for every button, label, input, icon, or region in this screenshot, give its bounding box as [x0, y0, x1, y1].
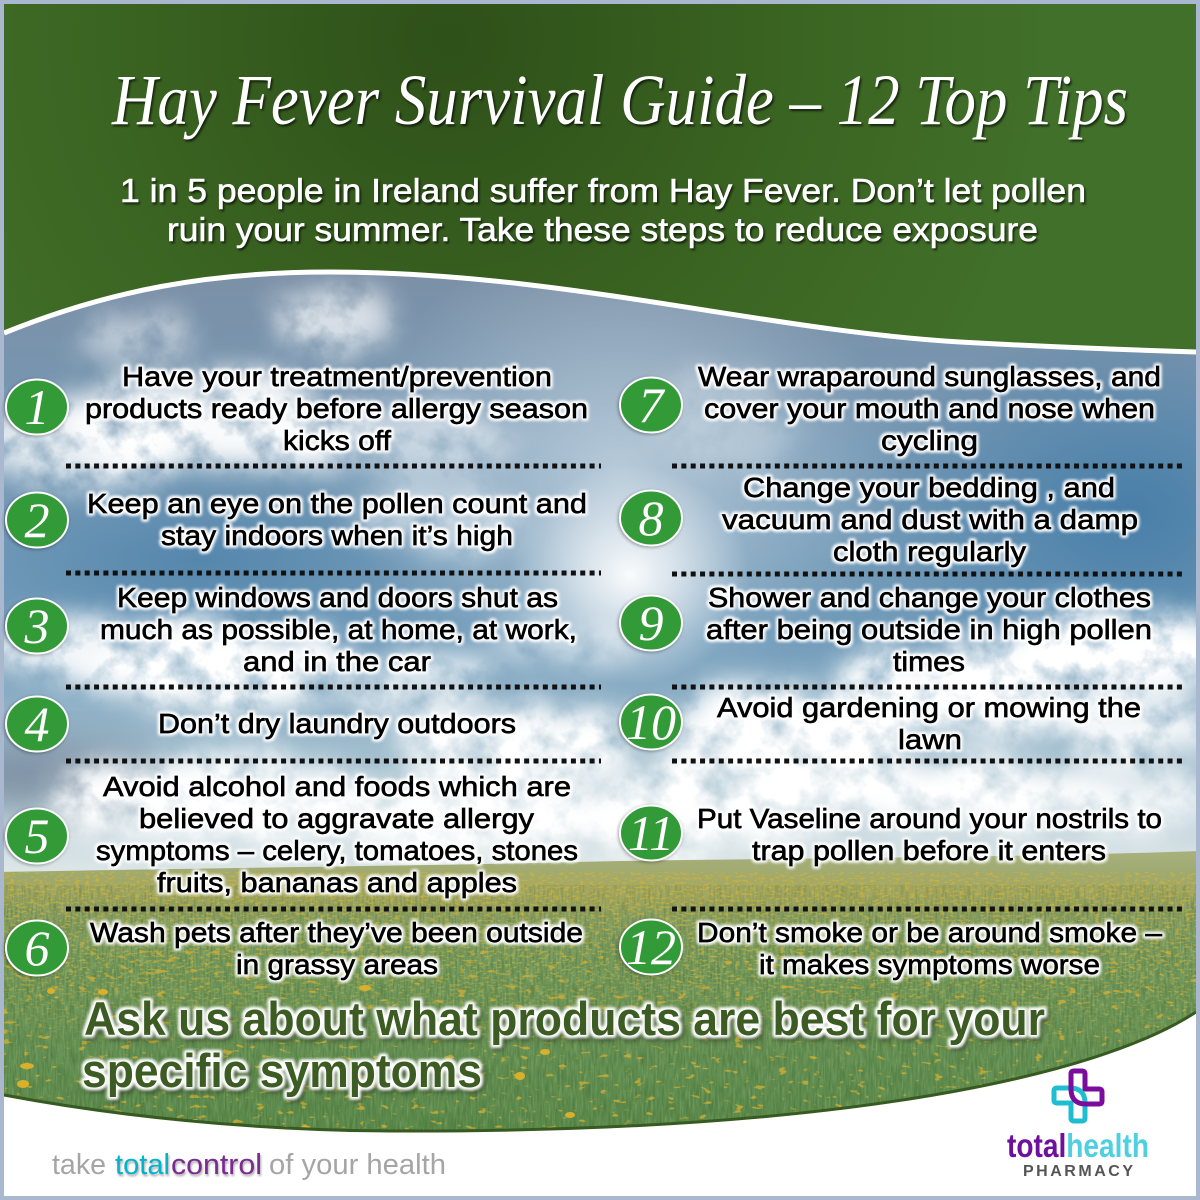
subtitle: 1 in 5 people in Ireland suffer from Hay Fever. Don’t let pollen — [120, 172, 1086, 209]
tip 12 text: Don’t smoke or be around smoke – — [697, 917, 1162, 948]
tip 5 text: believed to aggravate allergy — [139, 803, 534, 834]
tip 9 text: Shower and change your clothes — [708, 582, 1151, 613]
tip 9 text: after being outside in high pollen — [706, 614, 1152, 645]
tip 5 — [6, 771, 578, 898]
number badge 3 — [6, 598, 68, 654]
tip 2 — [6, 488, 587, 551]
sky — [0, 260, 1200, 880]
tip 11 text: trap pollen before it enters — [752, 835, 1106, 866]
sun — [519, 478, 742, 677]
tip 2 text: Keep an eye on the pollen count and — [87, 488, 587, 519]
tip 6 text: Wash pets after they’ve been outside — [90, 917, 583, 948]
tip 8 text: vacuum and dust with a damp — [722, 504, 1138, 535]
number badge 7: 7 — [638, 377, 666, 433]
tip 5 text: symptoms – celery, tomatoes, stones — [96, 835, 578, 866]
tip 1 text: Have your treatment/prevention — [122, 361, 552, 392]
pale blades — [0, 885, 1200, 1140]
tip 5 text — [96, 771, 578, 898]
tip 1 text: kicks off — [283, 425, 391, 456]
tip 1 text: products ready before allergy season — [85, 393, 588, 424]
green edge under meadow — [4, 1012, 1196, 1131]
tip 10 text: lawn — [898, 724, 962, 755]
tip 1 text — [85, 361, 588, 456]
tip 11 — [620, 803, 1162, 866]
tip 11 text — [697, 803, 1162, 866]
near flowers — [0, 950, 1200, 1140]
grass texture — [0, 885, 1200, 1140]
tip 10 text — [717, 692, 1141, 755]
tip 8 text — [722, 472, 1138, 567]
number badge 12: 12 — [626, 919, 676, 975]
photo: sky and meadow — [0, 240, 1200, 1146]
number badge 4: 4 — [24, 696, 50, 752]
tip 7 — [620, 361, 1161, 456]
call to action: Ask us about what products are best for your — [84, 992, 1045, 1045]
number badge 2 — [6, 492, 68, 548]
tip 11 text: Put Vaseline around your nostrils to — [697, 803, 1162, 834]
number badge 9: 9 — [638, 595, 664, 651]
number badge 10: 10 — [626, 694, 676, 750]
tip 9 text — [706, 582, 1152, 677]
tip 6 text — [90, 917, 583, 980]
tip 9 text: times — [893, 646, 965, 677]
number badge 9 — [620, 595, 682, 651]
tip 2 text — [87, 488, 587, 551]
footer tagline — [52, 1149, 446, 1181]
tip 12 — [620, 917, 1162, 980]
dark cloud left — [0, 743, 160, 807]
tip 2 text: stay indoors when it’s high — [161, 520, 513, 551]
logo pharmacy: PHARMACY — [1023, 1163, 1133, 1180]
tip 8 text: Change your bedding , and — [743, 472, 1115, 503]
number badge 8: 8 — [638, 490, 664, 546]
deep blue left sky — [35, 495, 364, 620]
meadow — [0, 851, 1200, 1140]
footer tagline: control — [171, 1149, 262, 1181]
number badge 3: 3 — [24, 598, 50, 654]
tip 12 text — [697, 917, 1162, 980]
number badge 1: 1 — [24, 379, 50, 435]
tip 5 text: fruits, bananas and apples — [157, 867, 517, 898]
number badge 7 — [620, 377, 682, 433]
subtitle: ruin your summer. Take these steps to reduce exposure — [167, 211, 1038, 248]
subtitle — [120, 172, 1086, 248]
logo cross — [1054, 1071, 1102, 1121]
footer tagline: total — [115, 1149, 170, 1181]
number badge 8 — [620, 490, 682, 546]
tip 7 text: Wear wraparound sunglasses, and — [698, 361, 1161, 392]
call to action — [82, 992, 1045, 1097]
number badge 6 — [6, 920, 68, 976]
tip 3 text — [100, 582, 577, 677]
tip 4 text: Don’t dry laundry outdoors — [158, 708, 516, 739]
yellow flower haze — [0, 876, 1200, 908]
tip 4 — [6, 696, 516, 752]
tip dividers — [66, 466, 1183, 909]
tip 7 text: cover your mouth and nose when — [704, 393, 1155, 424]
number badge 4 — [6, 696, 68, 752]
logo — [1007, 1071, 1149, 1180]
tip 6 — [6, 917, 583, 980]
tip 10 text: Avoid gardening or mowing the — [717, 692, 1141, 723]
number badge 1 — [6, 379, 68, 435]
tip 7 text: cycling — [881, 425, 978, 456]
tip 3 text: Keep windows and doors shut as — [117, 582, 558, 613]
number badge 5: 5 — [24, 808, 50, 864]
sun glow — [382, 287, 866, 664]
tip 8 — [620, 472, 1138, 567]
footer tagline: of your health — [269, 1149, 446, 1181]
number badge 2: 2 — [24, 492, 50, 548]
deep blue right sky — [920, 353, 1196, 624]
tip 5 text: Avoid alcohol and foods which are — [103, 771, 571, 802]
green header band — [4, 4, 1196, 354]
clouds — [0, 288, 1200, 868]
number badge 5 — [6, 808, 68, 864]
tip 3 text: much as possible, at home, at work, — [100, 614, 577, 645]
tip 8 text: cloth regularly — [833, 536, 1026, 567]
logo wordmark: totalhealth — [1007, 1127, 1149, 1164]
tip 10 — [620, 692, 1141, 755]
tip 3 — [6, 582, 577, 677]
dandelions — [17, 985, 575, 1128]
number badge 6: 6 — [24, 920, 50, 976]
tip 3 text: and in the car — [243, 646, 431, 677]
tip 6 text: in grassy areas — [236, 949, 438, 980]
call to action: specific symptoms — [82, 1044, 482, 1097]
tip 12 text: it makes symptoms worse — [759, 949, 1100, 980]
white curve above photo — [4, 272, 1196, 352]
footer tagline: take — [52, 1149, 106, 1181]
number badge 11: 11 — [628, 805, 674, 861]
tip 7 text — [698, 361, 1161, 456]
tip 1 — [6, 361, 588, 456]
distant flowers — [0, 872, 1200, 1057]
tip 9 — [620, 582, 1152, 677]
